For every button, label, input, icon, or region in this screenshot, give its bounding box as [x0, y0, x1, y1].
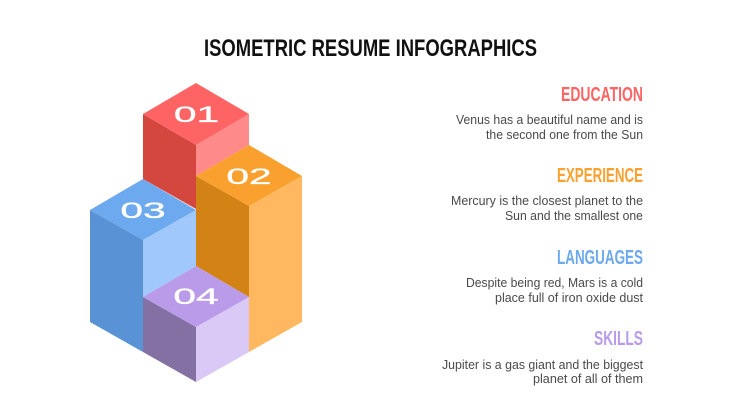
cube 01: red	[143, 83, 249, 209]
title: ISOMETRIC RESUME INFOGRAPHICS	[204, 35, 537, 62]
heading: experience: EXPERIENCE	[557, 165, 643, 187]
text: experience description: Sun and the smallest one	[505, 209, 643, 223]
block: skills	[442, 328, 644, 386]
heading: education: EDUCATION	[561, 84, 643, 106]
number 02: 02	[226, 164, 272, 189]
block: education	[456, 84, 643, 142]
text: languages description: place full of iron oxide dust	[495, 291, 644, 305]
number 01: 01	[174, 102, 219, 127]
block: experience	[451, 165, 643, 223]
text: languages description: Despite being red, Mars is a cold	[466, 276, 643, 290]
text: skills description: Jupiter is a gas giant and the biggest	[442, 358, 644, 372]
cube 02: orange	[196, 145, 302, 352]
number 04: 04	[173, 284, 219, 309]
cube 03: blue	[90, 179, 196, 352]
text: education description	[456, 113, 643, 142]
text: languages description	[466, 276, 644, 305]
cube 04: purple	[143, 266, 249, 382]
text: skills description: planet of all of them	[533, 372, 643, 386]
text: skills description	[442, 358, 644, 386]
heading: skills: SKILLS	[594, 328, 643, 350]
heading: languages: LANGUAGES	[557, 247, 643, 269]
number 03: 03	[120, 198, 166, 223]
text: education description: the second one from the Sun	[486, 128, 643, 142]
text: experience description	[451, 194, 643, 223]
isometric cube chart	[90, 83, 302, 382]
block: languages	[466, 247, 644, 305]
text: education description: Venus has a beautiful name and is	[456, 113, 643, 127]
text: experience description: Mercury is the closest planet to the	[451, 194, 643, 208]
